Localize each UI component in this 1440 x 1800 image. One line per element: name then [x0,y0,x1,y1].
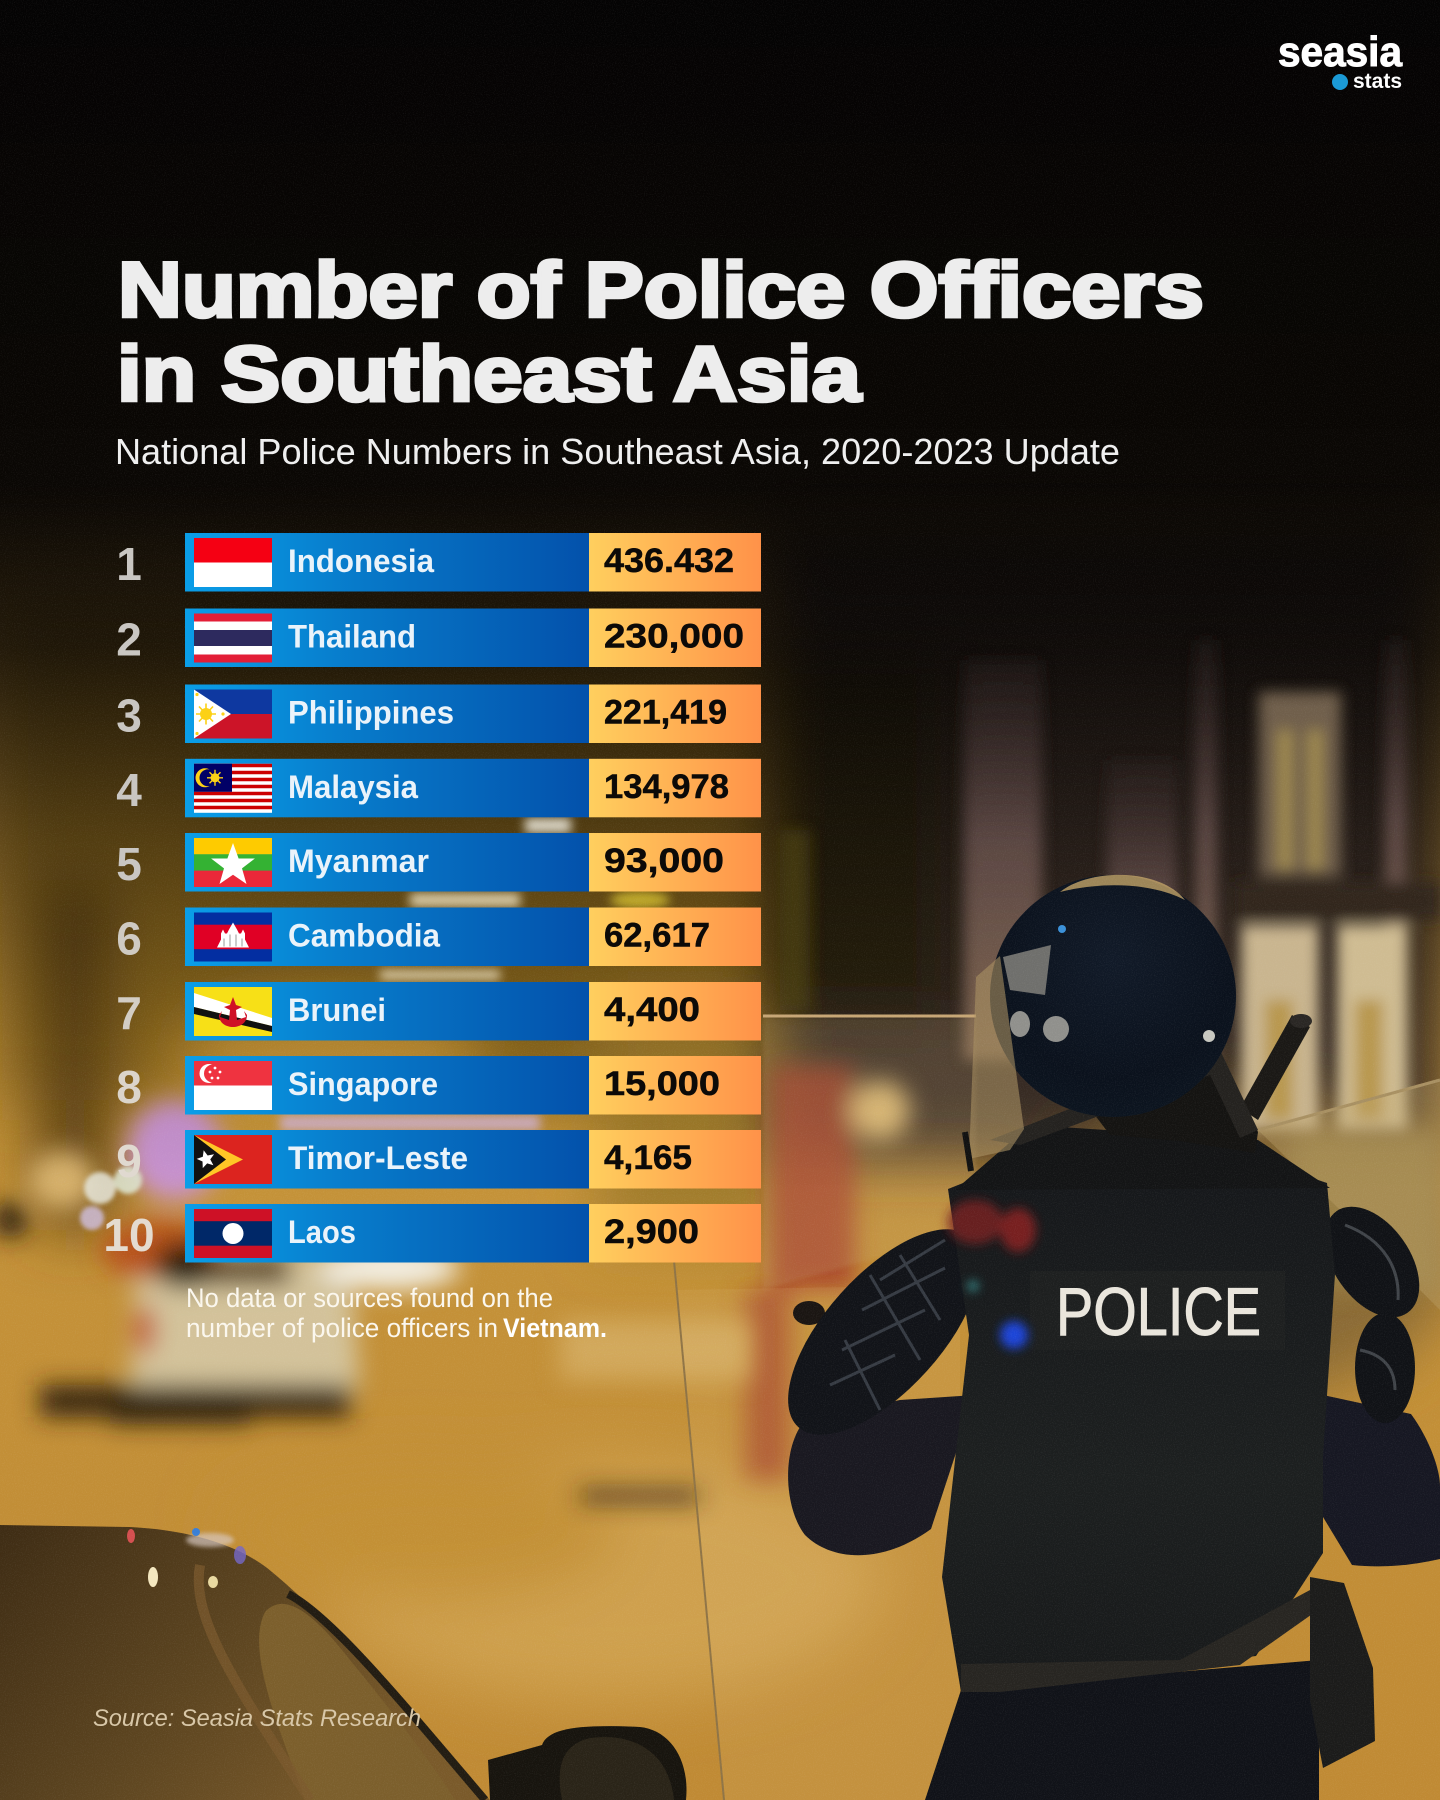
row 4: Malaysia: 134,978 [604,768,729,806]
lens flares [947,1200,1036,1349]
row 2: Thailand: 2 [116,614,142,666]
row 5: Myanmar: 93,000 [604,842,724,880]
row 9: Timor-Leste: Timor-Leste [288,1140,468,1176]
row 10: Laos: 2,900 [604,1213,699,1251]
row 8: Singapore: Singapore [288,1066,438,1102]
belt [961,1590,1325,1692]
row 2: Thailand: Thailand [288,618,416,654]
wing mirror [488,1726,687,1800]
helmet [990,875,1236,1117]
row 9: Timor-Leste [116,1130,761,1188]
row 4: Malaysia: Malaysia [288,769,418,805]
row 5: Myanmar [116,833,761,892]
subtitle: National Police Numbers in Southeast Asia, 2020-2023 Update [115,431,1120,472]
title: Number of Police Officers [118,246,1204,334]
row 6: Cambodia: 6 [116,912,142,964]
row 3: Philippines: 221,419 [604,694,727,732]
footnote: Vietnam. [503,1313,607,1343]
row 5: Myanmar: Myanmar [288,843,429,879]
row 3: Philippines: 3 [116,690,142,742]
row 8: Singapore: 15,000 [604,1065,720,1103]
ranking table [103,533,761,1262]
police officer [755,875,1440,1800]
row 4: Malaysia: 4 [116,764,142,816]
row 7: Brunei: 7 [116,987,142,1039]
row 8: Singapore: 8 [116,1061,142,1113]
police patch: POLICE [1056,1274,1261,1350]
pouch [1310,1577,1375,1768]
row 7: Brunei: Brunei [288,992,386,1028]
row 7: Brunei [116,982,761,1040]
row 7: Brunei: 4,400 [604,991,700,1029]
logo: seasia stats: stats [1353,70,1402,93]
row 1: Indonesia [116,533,761,592]
row 6: Cambodia: 62,617 [604,916,710,954]
title: in Southeast Asia [117,330,862,418]
row 10: Laos: 10 [103,1209,155,1261]
footnote: No data or sources found on the [186,1283,553,1313]
left arm sleeve [788,1395,975,1555]
row 3: Philippines: Philippines [288,694,454,730]
row 1: Indonesia: Indonesia [288,543,434,579]
row 1: Indonesia: 1 [116,538,142,590]
row 3: Philippines [116,684,761,743]
row 2: Thailand: 230,000 [604,618,744,656]
police shields in the background [673,1016,1440,1800]
row 6: Cambodia: Cambodia [288,918,440,954]
row 10: Laos: Laos [288,1214,356,1250]
row 9: Timor-Leste: 4,165 [604,1139,692,1177]
visor [969,956,1024,1159]
row 9: Timor-Leste: 9 [116,1135,142,1187]
right arm sleeve [1323,1395,1440,1566]
left arm guard [755,1198,1013,1466]
row 1: Indonesia: 436.432 [604,542,734,580]
trousers [925,1660,1319,1800]
row 10: Laos [103,1204,761,1262]
row 6: Cambodia [116,908,761,966]
source: Source: Seasia Stats Research [93,1705,421,1732]
building facade and windows [780,640,1440,1130]
row 5: Myanmar: 5 [116,838,142,890]
row 4: Malaysia [116,759,761,817]
row 2: Thailand [116,608,761,667]
row 8: Singapore [116,1056,761,1114]
baton [1240,1015,1310,1120]
neck guard [1091,1053,1258,1153]
right arm guard [1305,1189,1439,1423]
footnote: number of police officers in [186,1313,498,1343]
footnote [186,1283,607,1343]
radio antenna [965,1132,971,1171]
neck [955,1125,1330,1190]
foreground car [0,1525,687,1800]
vest [942,1147,1335,1692]
logo: seasia stats: seasia [1278,28,1403,75]
title [117,246,1204,418]
